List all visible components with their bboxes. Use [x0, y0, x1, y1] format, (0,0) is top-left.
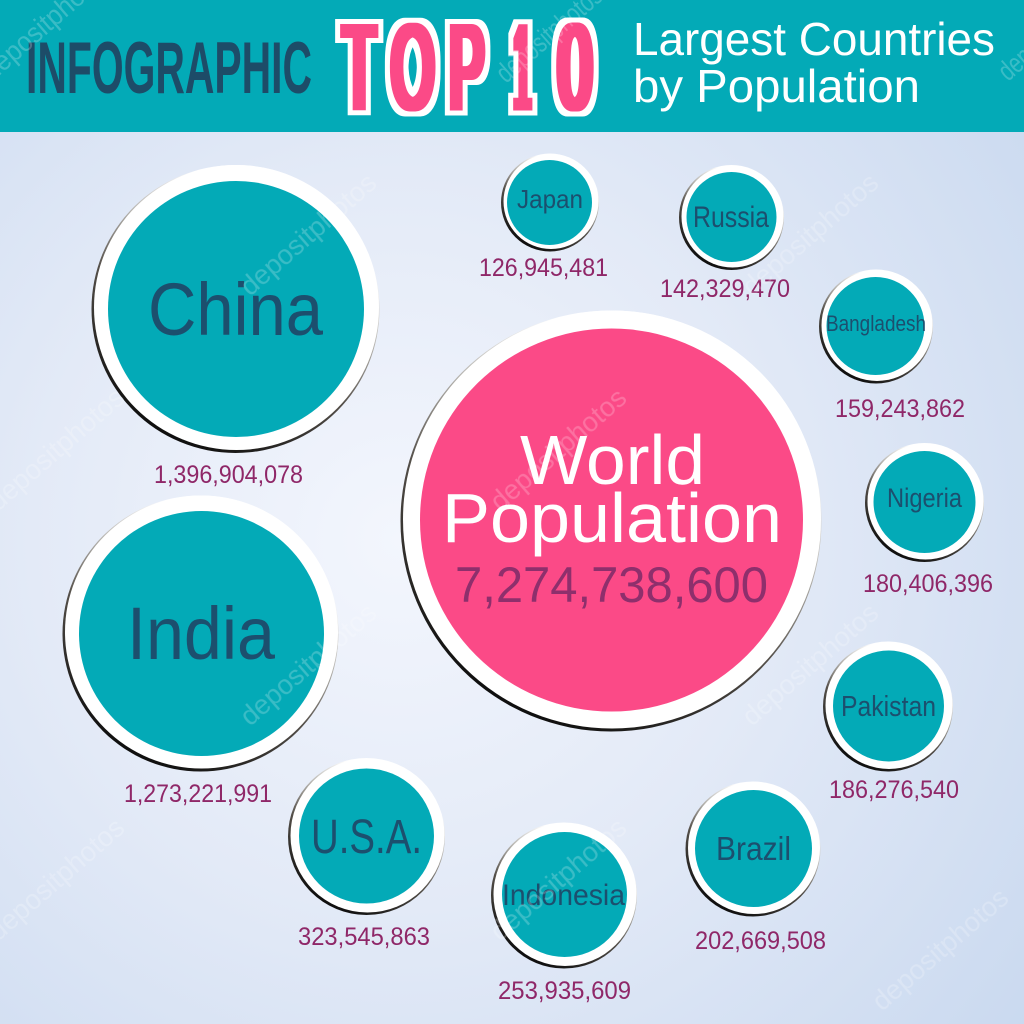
label: world population: World — [520, 421, 705, 499]
title: top 10 — [342, 0, 594, 138]
circle: u.s.a. — [288, 758, 445, 915]
title: top 10: 0 — [556, 0, 594, 138]
label: world population: Population — [442, 479, 782, 557]
value: india: 1,273,221,991 — [124, 780, 272, 808]
value: bangladesh: 159,243,862 — [835, 395, 965, 423]
value: brazil: 202,669,508 — [695, 927, 826, 955]
value: china: 1,396,904,078 — [154, 461, 303, 489]
watermarks: depositphotos — [736, 597, 884, 732]
circle: nigeria — [865, 443, 984, 562]
value: u.s.a.: 323,545,863 — [298, 923, 430, 951]
value: nigeria: 180,406,396 — [863, 570, 993, 598]
label: u.s.a.: U.S.A. — [311, 811, 422, 864]
value: russia: 142,329,470 — [660, 275, 790, 303]
circle: india — [62, 496, 338, 772]
label: world population — [442, 421, 782, 557]
watermarks: depositphotos — [484, 382, 632, 517]
value: pakistan: 186,276,540 — [829, 776, 959, 804]
label: indonesia: Indonesia — [502, 879, 625, 912]
title: largest countries by population: Largest Countries — [633, 13, 995, 65]
value: japan: 126,945,481 — [479, 254, 608, 282]
watermarks: depositphotos — [484, 812, 632, 947]
label: nigeria: Nigeria — [887, 483, 963, 513]
label: pakistan: Pakistan — [841, 691, 936, 723]
title: top 10: T — [342, 0, 376, 138]
header band — [0, 0, 1024, 138]
label: russia: Russia — [693, 201, 769, 234]
watermarks: depositphotos — [866, 882, 1014, 1017]
circle: bangladesh — [819, 270, 933, 384]
label: bangladesh: Bangladesh — [826, 311, 926, 336]
label: india: India — [127, 592, 276, 675]
title: infographic: INFOGRAPHIC — [26, 28, 312, 109]
watermarks: depositphotos — [736, 167, 884, 302]
watermarks: depositphotos — [234, 167, 382, 302]
circle: china — [92, 165, 380, 453]
label: japan: Japan — [517, 184, 583, 214]
label: brazil: Brazil — [716, 830, 791, 867]
circle: world population — [400, 310, 822, 732]
circle: japan — [501, 154, 599, 252]
title: top 10: 1 — [514, 0, 531, 138]
circle: indonesia — [491, 822, 637, 968]
title: top 10: O — [390, 0, 436, 138]
circle: pakistan — [823, 642, 953, 772]
label: china: China — [148, 268, 324, 351]
title: top 10: P — [449, 0, 485, 138]
watermarks: depositphotos — [234, 597, 382, 732]
value: indonesia: 253,935,609 — [498, 977, 631, 1005]
title: largest countries by population — [633, 13, 995, 112]
circle: russia — [679, 165, 784, 270]
title: largest countries by population: by Population — [633, 60, 920, 112]
value: world population: 7,274,738,600 — [455, 557, 768, 613]
circle: brazil — [686, 782, 820, 916]
